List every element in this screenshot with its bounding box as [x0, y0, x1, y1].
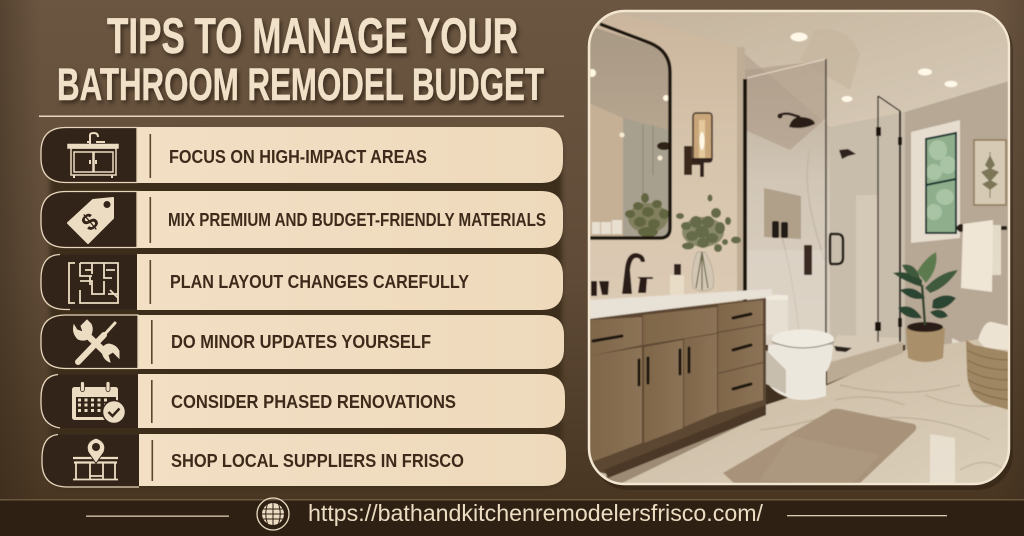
potted plant [893, 252, 958, 362]
toilet [766, 295, 834, 400]
title divider [39, 116, 564, 117]
tip text: PLAN LAYOUT CHANGES CAREFULLY [170, 272, 469, 292]
icon: wrench and screwdriver [74, 320, 119, 362]
tip text: CONSIDER PHASED RENOVATIONS [171, 392, 456, 412]
wall art [974, 140, 1006, 205]
vanity cabinet [589, 298, 766, 478]
tip text: SHOP LOCAL SUPPLIERS IN FRISCO [171, 451, 464, 471]
floor reflection [930, 434, 955, 484]
icon: price tag: $ [77, 207, 105, 237]
website url: https://bathandkitchenremodelersfrisco.com/ [308, 500, 764, 526]
floor [589, 335, 1009, 484]
wall sconce [684, 113, 712, 177]
title [57, 8, 544, 110]
row 5: consider phased renovations [41, 374, 565, 428]
floor veining [760, 385, 1005, 470]
photo: bathroom [588, 11, 1013, 490]
title: BATHROOM REMODEL BUDGET [57, 59, 544, 110]
footer rule left [86, 516, 229, 517]
icon: calendar with check [72, 382, 126, 424]
ceiling [618, 12, 1008, 128]
countertop [589, 289, 772, 319]
shower curb and floor [827, 335, 903, 384]
glass shower panels [743, 59, 902, 359]
tip text: DO MINOR UPDATES YOURSELF [171, 332, 431, 352]
row 6: shop local suppliers in frisco [42, 434, 566, 487]
row 1: focus on high-impact areas [41, 127, 563, 183]
right wall [905, 81, 1009, 352]
basket with towels [966, 322, 1009, 410]
shower head [778, 114, 856, 159]
icon: floor plan [69, 263, 118, 303]
icon: price tag [68, 198, 113, 243]
cabinet shadow on floor [606, 424, 744, 483]
row 3: plan layout changes carefully [41, 254, 563, 310]
row 4: do minor updates yourself [41, 315, 564, 369]
footer bar [0, 498, 1024, 536]
recessed lights [790, 32, 958, 102]
towel and bar [957, 220, 1007, 292]
left wall [590, 140, 738, 310]
footer rule right [787, 515, 947, 516]
shower niche [764, 188, 812, 275]
icon: map pin and store [73, 438, 118, 480]
title: TIPS TO MANAGE YOUR [107, 8, 518, 64]
mirror [588, 24, 671, 240]
rug [723, 409, 916, 486]
row 2: mix premium and budget-friendly materials [41, 191, 563, 248]
tip text: MIX PREMIUM AND BUDGET-FRIENDLY MATERIALS [168, 210, 546, 230]
panel: tips list [41, 127, 566, 488]
faucet [591, 253, 653, 296]
soap dispenser [670, 264, 684, 295]
icon: vanity cabinet [68, 133, 118, 178]
tip text: FOCUS ON HIGH-IMPACT AREAS [169, 147, 427, 167]
icon: globe [257, 498, 289, 530]
vase with eucalyptus [676, 194, 741, 291]
window [911, 120, 960, 243]
shower walls [740, 50, 905, 345]
